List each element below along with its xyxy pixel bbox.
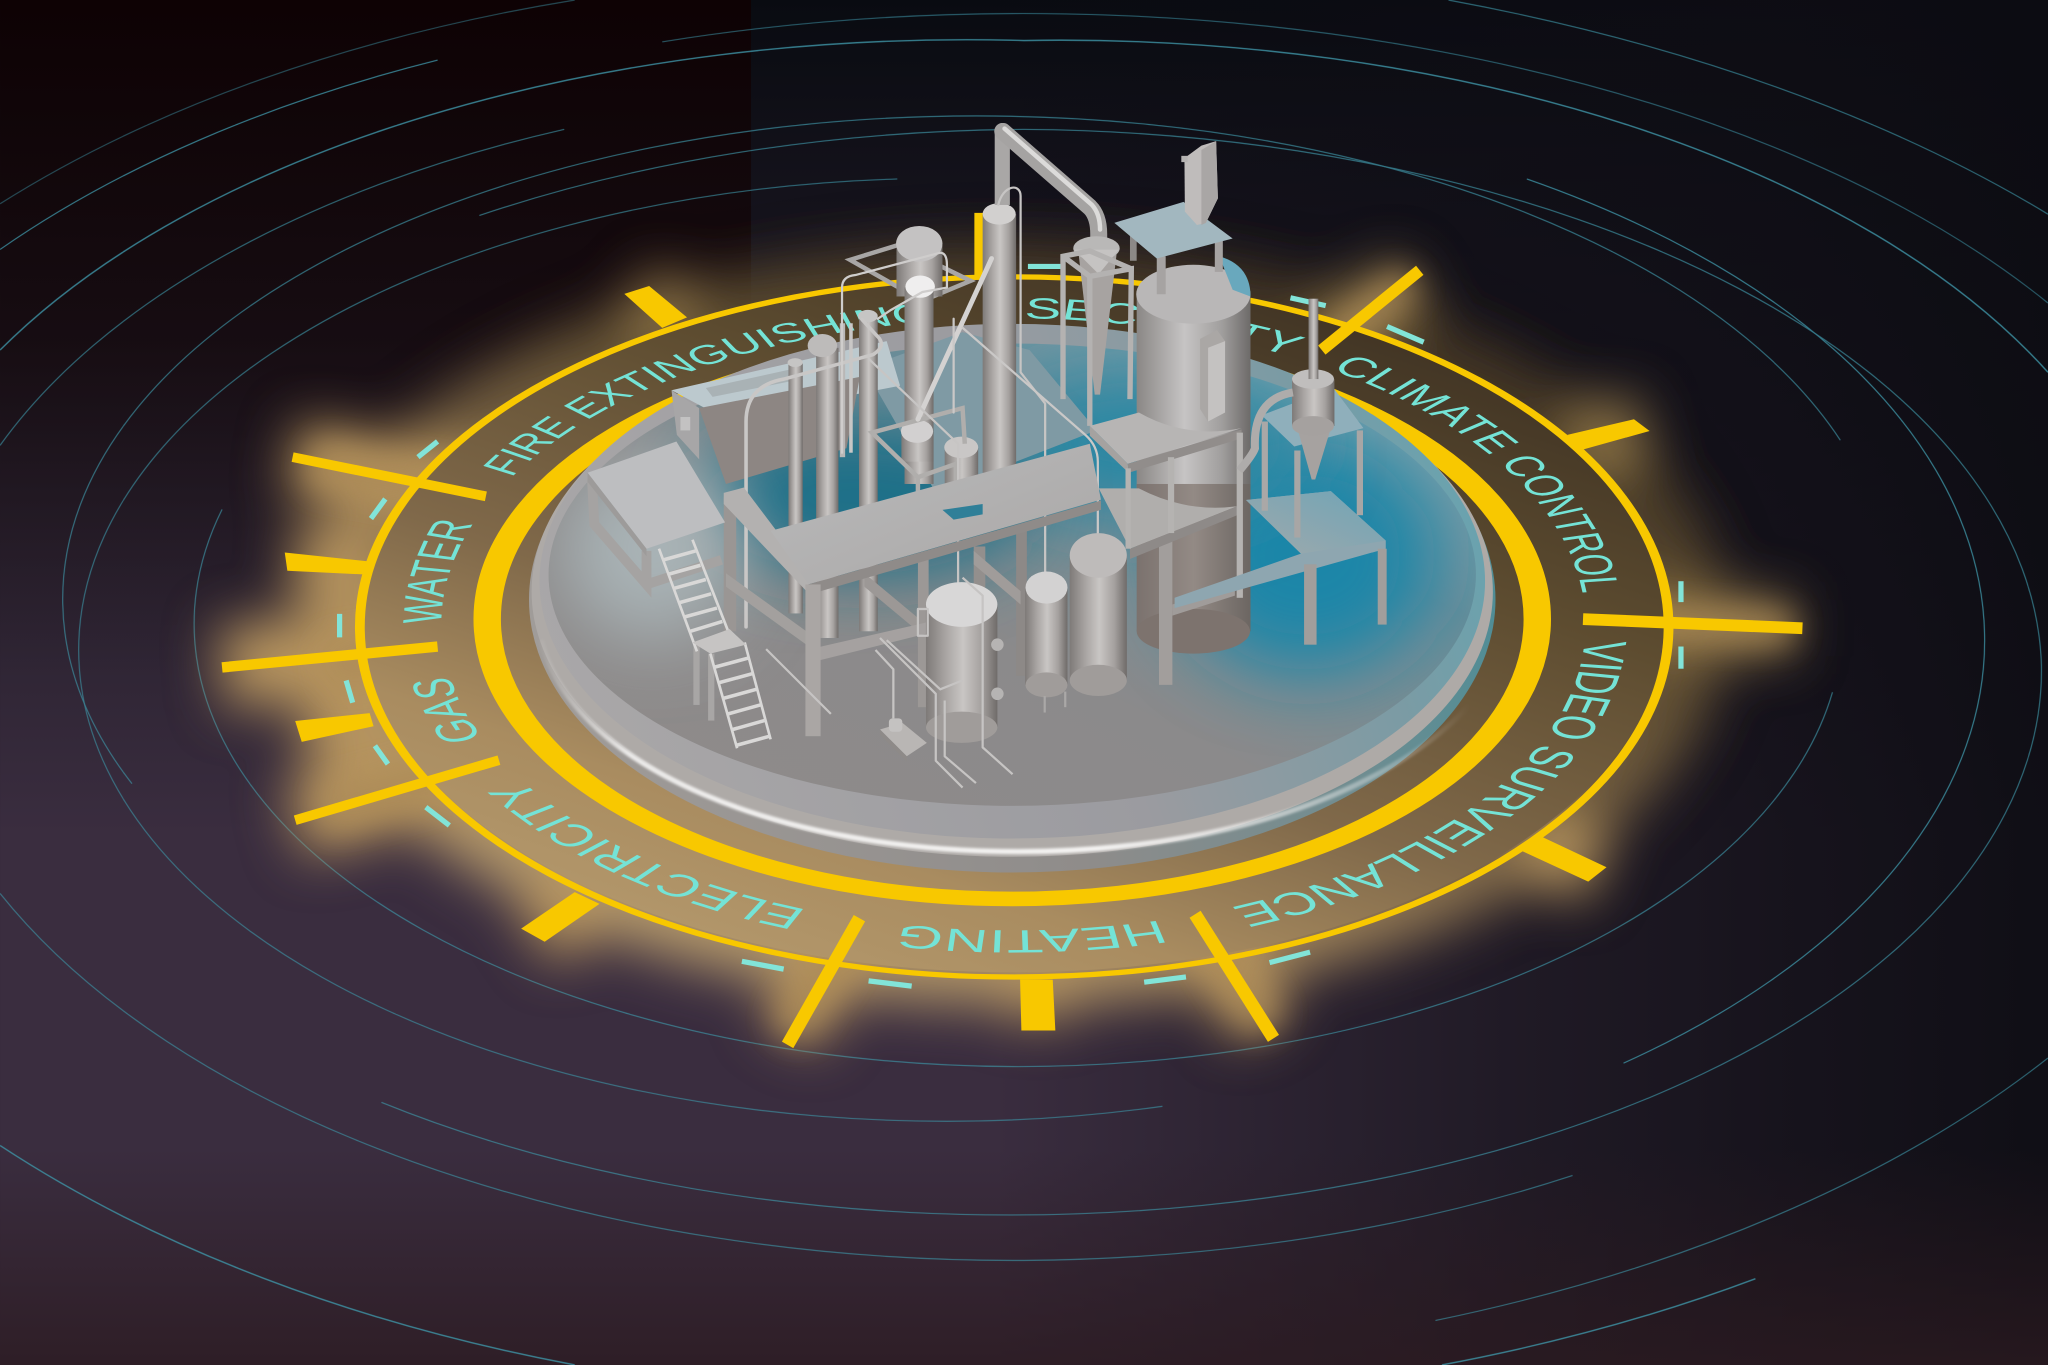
- back deck: [864, 332, 1096, 493]
- ring labels: GAS: [413, 678, 477, 742]
- yellow crossing ticks: [222, 213, 1802, 1045]
- column pair with upper tank: [850, 226, 971, 484]
- front floor pipes: [766, 578, 1013, 788]
- stairs: [659, 540, 771, 748]
- industrial plant: [588, 129, 1387, 788]
- ring labels: ELECTRICITY: [488, 788, 803, 929]
- ring labels: [403, 298, 1626, 953]
- slim columns: [788, 310, 878, 638]
- overhead process pipe: [995, 129, 1100, 243]
- second front tank: [1025, 571, 1067, 713]
- outer thin yellow ring: [360, 277, 1669, 977]
- inner thick yellow ring: [487, 339, 1537, 899]
- ring labels: WATER: [403, 520, 472, 623]
- tank stand frame: [1090, 413, 1243, 685]
- main deck with legs and beams: [724, 444, 1101, 736]
- thin process pipes: [746, 188, 1098, 627]
- cyan dashes: [340, 266, 1681, 986]
- yellow thick short ticks: [285, 286, 1650, 1031]
- tall distillation column: [983, 203, 1016, 473]
- third front tank: [1070, 533, 1127, 696]
- ring labels: CLIMATE CONTROL: [1339, 358, 1617, 592]
- first front tank: [926, 582, 1004, 743]
- big reactor tank: [1136, 256, 1251, 654]
- cyclone with frame: [1063, 236, 1131, 426]
- pump: [880, 718, 927, 762]
- ring labels: HEATING: [900, 921, 1165, 953]
- hopper box: [671, 341, 900, 484]
- right equipment table: [1175, 299, 1387, 645]
- ring labels: VIDEO SURVEILLANCE: [1233, 642, 1626, 927]
- amber glow halo: [222, 276, 1792, 1032]
- ring labels: FIRE EXTINGUISHING: [483, 304, 904, 476]
- small vessels with frame: [872, 408, 978, 546]
- left platform: [588, 442, 725, 584]
- tank top platform and vent: [1114, 141, 1233, 294]
- metal disc platform: [529, 324, 1496, 872]
- ring labels: SECURITY: [1027, 298, 1306, 352]
